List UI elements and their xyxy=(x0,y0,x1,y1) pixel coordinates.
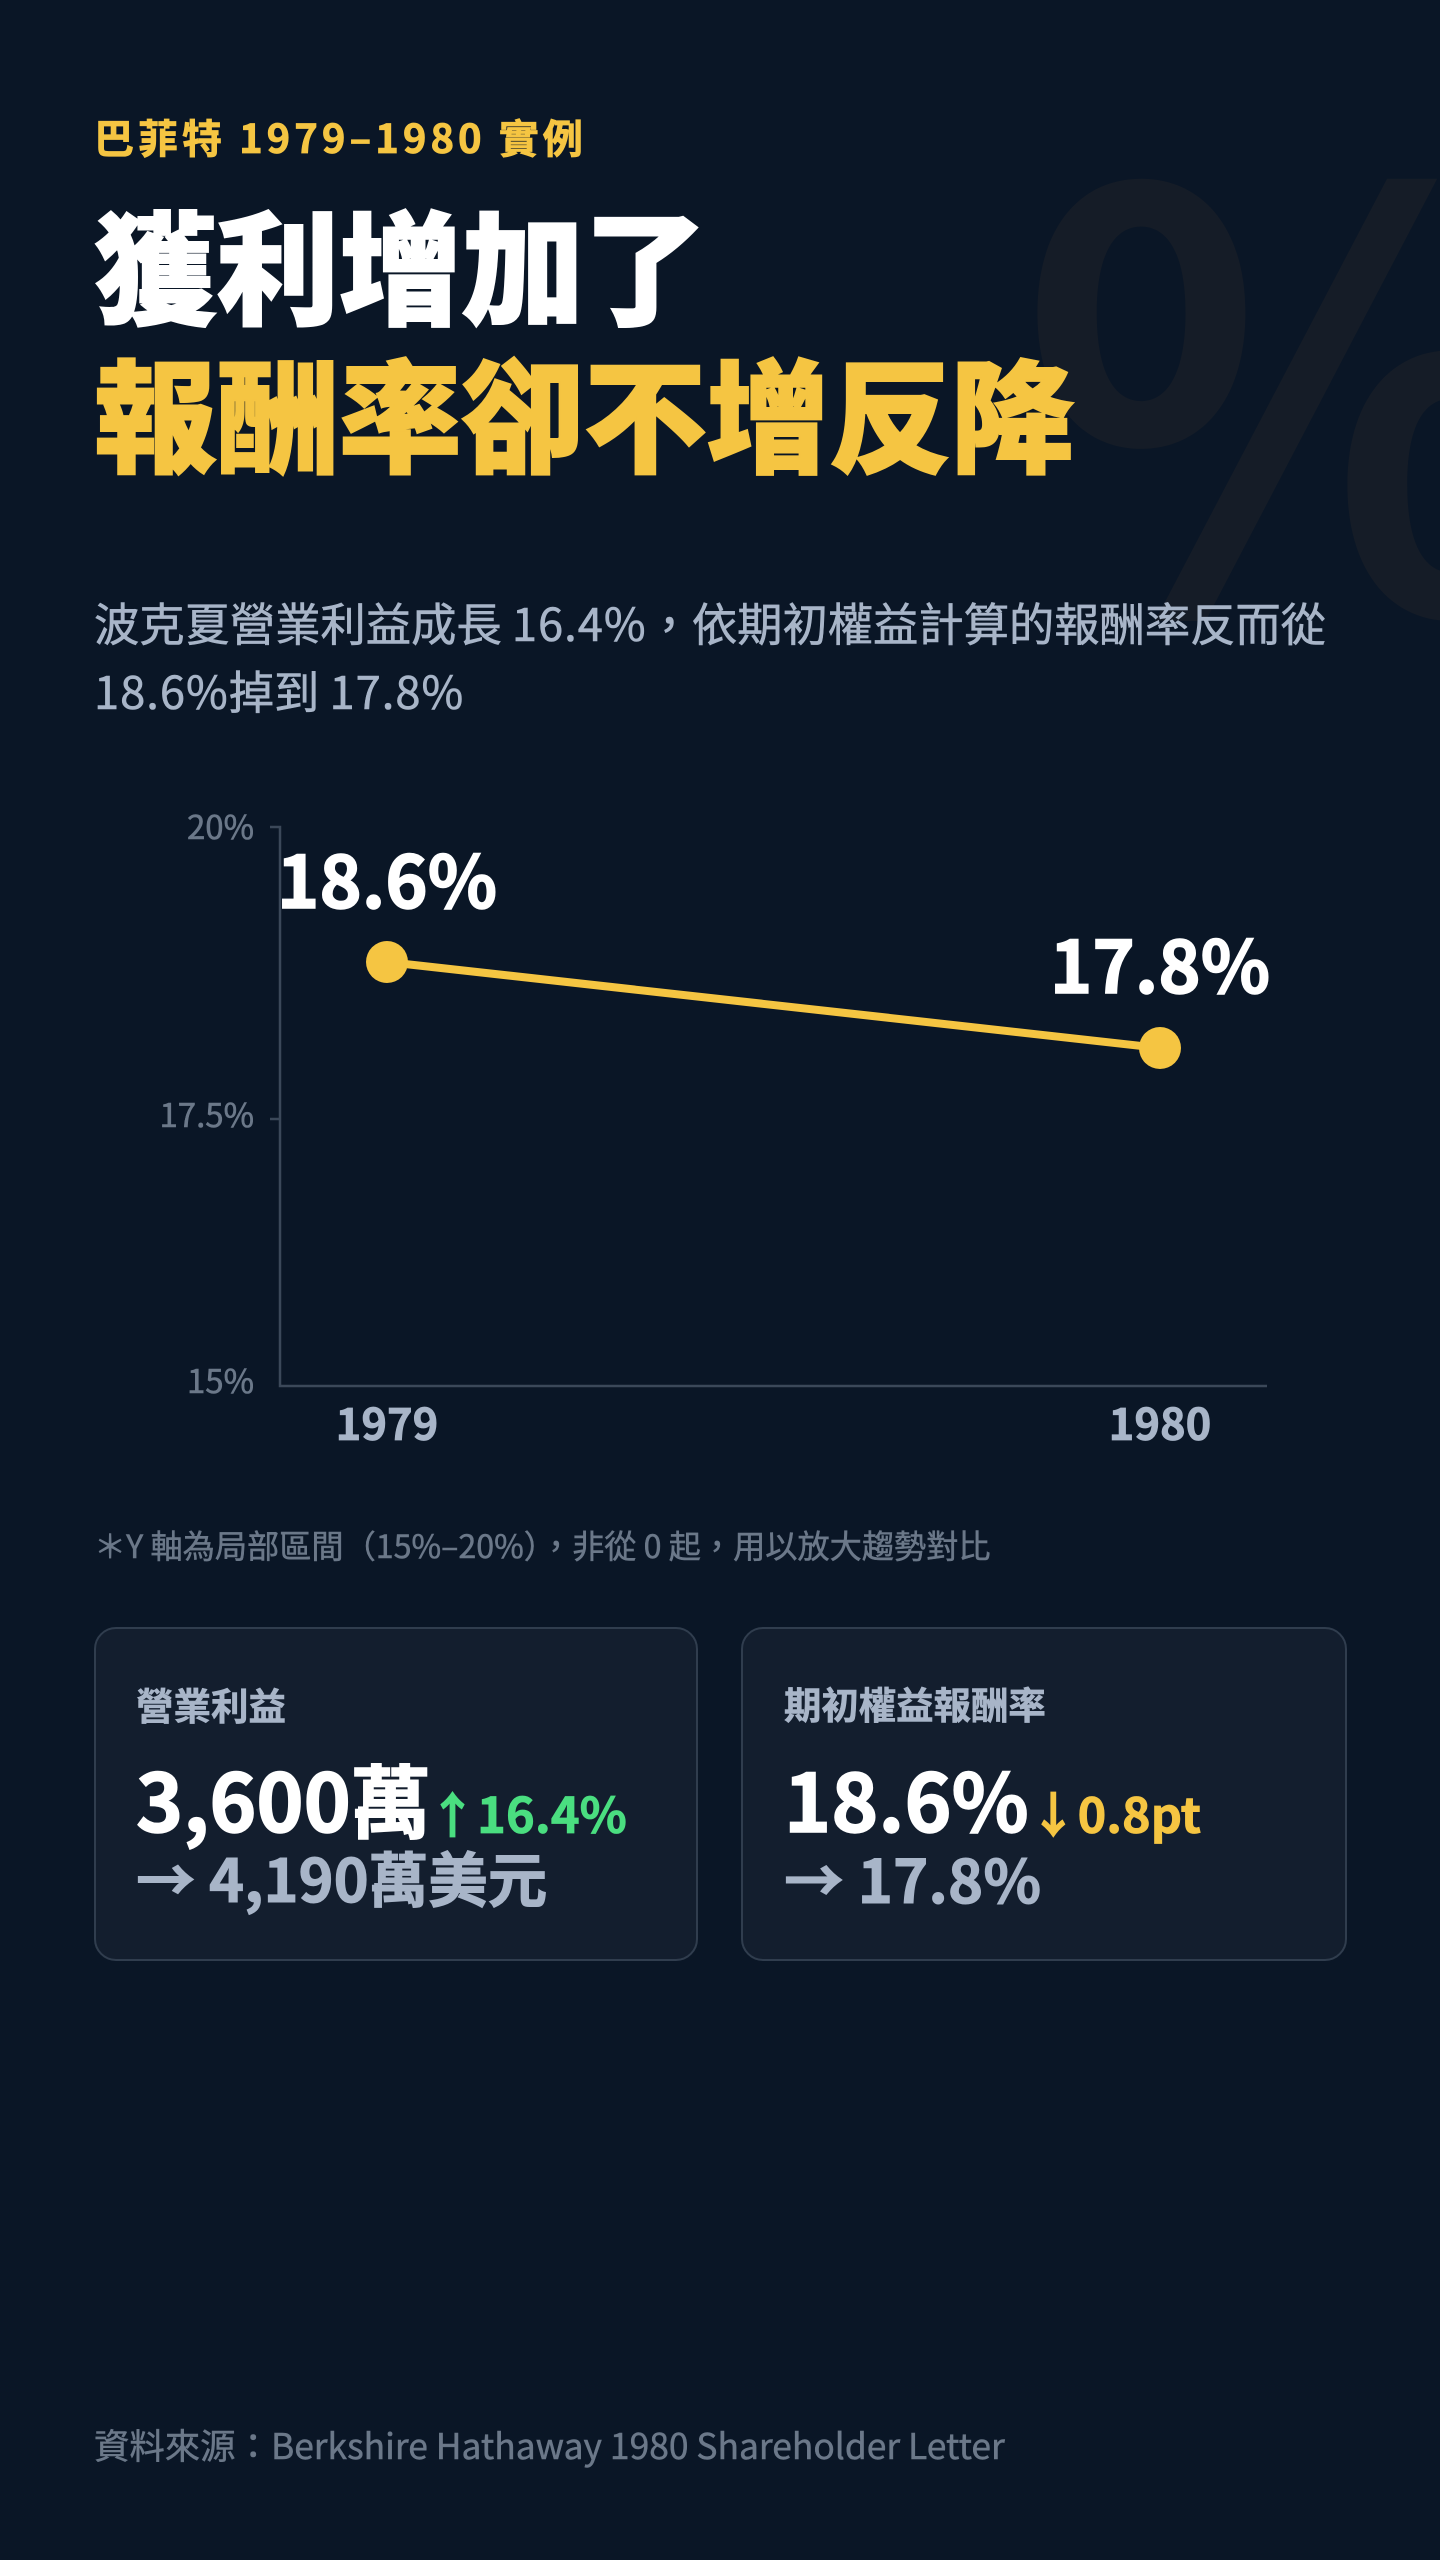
data point 1979 xyxy=(366,941,408,983)
source: 資料來源：Berkshire Hathaway 1980 Shareholder Letter xyxy=(94,2419,1005,2470)
y axis labels xyxy=(159,801,254,1403)
line chart xyxy=(159,801,1270,1453)
panel: operating profit xyxy=(94,1627,698,1961)
subtitle xyxy=(94,589,1326,723)
eyebrow: 巴菲特 1979–1980 實例 xyxy=(94,107,587,165)
subtitle: 18.6%掉到 17.8% xyxy=(94,657,464,723)
trend line xyxy=(387,962,1160,1048)
card result: → 17.8% xyxy=(784,1834,1041,1921)
chart note: ＊Y 軸為局部區間（15%–20%），非從 0 起，用以放大趨勢對比 xyxy=(94,1522,991,1568)
y axis labels: 15% xyxy=(187,1355,254,1403)
title xyxy=(94,174,1075,499)
panel: return on equity xyxy=(741,1627,1347,1961)
card change down: ↓0.8pt xyxy=(1029,1777,1201,1847)
value label 17.8%: 17.8% xyxy=(1050,909,1270,1014)
y axis labels: 20% xyxy=(187,801,254,849)
card label: 營業利益 xyxy=(136,1676,286,1731)
x axis labels: 1980 xyxy=(1109,1390,1211,1453)
card label: 期初權益報酬率 xyxy=(784,1676,1046,1730)
subtitle: 波克夏營業利益成長 16.4%，依期初權益計算的報酬率反而從 xyxy=(94,589,1326,655)
title line two: 報酬率卻不增反降 xyxy=(94,322,1074,499)
card value: 3,600萬 xyxy=(136,1740,431,1856)
card result: → 4,190萬美元 xyxy=(136,1834,547,1920)
card change up: ↑16.4% xyxy=(428,1777,627,1848)
x axis labels: 1979 xyxy=(336,1390,438,1453)
data point 1980 xyxy=(1139,1027,1181,1069)
x axis labels xyxy=(336,1390,1211,1453)
chart axes xyxy=(270,827,1267,1386)
card value: 18.6% xyxy=(784,1740,1029,1856)
value label 18.6%: 18.6% xyxy=(277,824,497,929)
y axis labels: 17.5% xyxy=(159,1089,254,1137)
title line one: 獲利增加了 xyxy=(94,174,706,351)
